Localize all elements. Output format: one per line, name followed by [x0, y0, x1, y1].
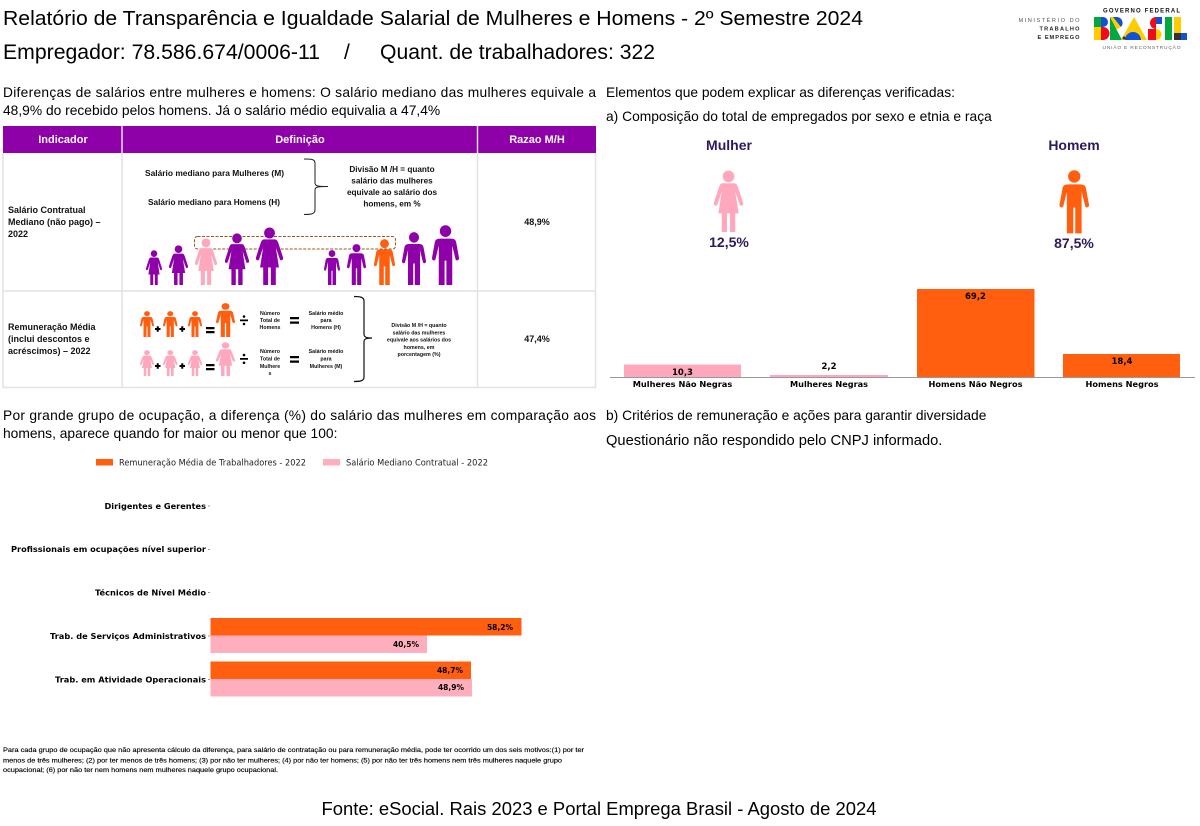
logo: ministério e governo federal: E EMPREGO [1038, 35, 1080, 41]
row: remuneração média: Divisão M /H = quanto [391, 323, 447, 329]
row: remuneração média: Salário médio [309, 349, 344, 355]
row: remuneração média: 47,4% [524, 334, 550, 344]
bar chart: composição por sexo e raça [610, 289, 1195, 389]
icon: man [1059, 170, 1089, 233]
logo: ministério e governo federal: MINISTÉRIO DO [1018, 17, 1080, 24]
bar chart: composição por sexo e raça: 10,3 [672, 368, 693, 378]
bar chart: diferença por grupo de ocupação: Profissionais em ocupações nível superior [11, 545, 206, 554]
gender share: mulher: Mulher [706, 137, 752, 153]
row: remuneração média: para [320, 318, 332, 324]
logo: ministério e governo federal: TRABALHO [1040, 26, 1080, 32]
row: remuneração média: homens, em [404, 345, 435, 351]
bar chart: diferença por grupo de ocupação: Dirigentes e Gerentes [104, 502, 206, 511]
footnote [3, 747, 585, 774]
heading: elementos explicativos: a) Composição do total de empregados por sexo e etnia e raça [606, 109, 992, 124]
legend: Remuneração Média de Trabalhadores - 2022 [119, 458, 306, 468]
row: remuneração média: Homens (H) [311, 325, 341, 331]
icon: women sum [140, 342, 235, 376]
row: salário contratual mediano: Salário mediano para Homens (H) [148, 198, 280, 207]
footnote: Para cada grupo de ocupação que não apresenta cálculo da diferença, para salário de contratação ou para remuneração média, pode ter ocorrido um dos seis motivos:(1) por ter [3, 747, 585, 754]
table: indicadores [3, 126, 596, 388]
row: remuneração média: porcentagem (%) [398, 352, 441, 358]
icon: woman [714, 170, 743, 232]
source: Fonte: eSocial. Rais 2023 e Portal Emprega Brasil - Agosto de 2024 [322, 799, 876, 819]
bar chart: composição por sexo e raça: Mulheres Não Negras [633, 380, 732, 389]
row: remuneração média: Número [260, 349, 281, 355]
footnote: menos de três mulheres; (2) por ter menos de três homens; (3) por não ter mulheres; (4) por não ter homens; (5) por não ter três homens nem três mulheres naquele grupo [3, 758, 562, 764]
title [3, 8, 863, 64]
row: salário contratual mediano: Divisão M /H = quanto [349, 165, 435, 174]
row: salário contratual mediano: Mediano (não pago) – [8, 217, 101, 227]
row: salário contratual mediano [8, 159, 550, 285]
row: remuneração média: (inclui descontos e [8, 334, 90, 344]
text: critérios de remuneração [606, 408, 987, 449]
gender share: homem [1048, 137, 1100, 251]
logo: ministério e governo federal [1018, 8, 1187, 51]
heading: elementos explicativos: Elementos que podem explicar as diferenças verificadas: [606, 85, 955, 100]
gender share: mulher: 12,5% [709, 234, 749, 250]
intro text: diferenças de salários [3, 85, 596, 118]
icon: men sum [140, 303, 235, 337]
footnote: ocupacional; (6) por não ter nem homens nem mulheres naquele grupo ocupacional. [3, 767, 278, 774]
bar chart: diferença por grupo de ocupação: 48,9% [438, 683, 464, 692]
row: remuneração média: Mulheres (M) [310, 364, 343, 370]
row: remuneração média: Homens [260, 325, 280, 331]
icon: row of men [324, 225, 459, 285]
row: remuneração média: Total de [260, 318, 280, 324]
title: Empregador: 78.586.674/0006-11 [3, 41, 320, 64]
text: grupo de ocupação [3, 408, 596, 441]
bar chart: diferença por grupo de ocupação: 48,7% [437, 666, 463, 675]
bar chart: composição por sexo e raça: Homens Não Negros [928, 380, 1023, 389]
table header: Indicador [38, 134, 88, 146]
bar chart: composição por sexo e raça: 18,4 [1112, 357, 1133, 367]
icon: row of women [146, 227, 283, 285]
row: remuneração média: Salário médio [309, 311, 344, 317]
row: remuneração média: Remuneração Média [8, 322, 97, 332]
bar chart: diferença por grupo de ocupação [11, 458, 522, 696]
row: salário contratual mediano: 48,9% [524, 217, 550, 227]
gender share: homem: Homem [1048, 137, 1100, 153]
bar chart: composição por sexo e raça: Mulheres Negras [790, 380, 868, 389]
bar chart: diferença por grupo de ocupação: Trab. em Atividade Operacionais [55, 676, 206, 684]
gender share: homem: 87,5% [1054, 235, 1094, 251]
gender share: mulher [706, 137, 752, 250]
row: remuneração média: acréscimos) – 2022 [8, 346, 91, 356]
text: critérios de remuneração: Questionário não respondido pelo CNPJ informado. [606, 433, 942, 449]
row: salário contratual mediano: equivale ao salário dos [347, 188, 437, 197]
text: critérios de remuneração: b) Critérios de remuneração e ações para garantir diversidade [606, 408, 987, 423]
row: remuneração média [8, 296, 550, 382]
row: remuneração média: equivale aos salários dos [387, 338, 451, 344]
title: Quant. de trabalhadores: 322 [380, 41, 655, 64]
row: remuneração média: Mulhere [260, 364, 280, 370]
bar chart: diferença por grupo de ocupação: 58,2% [487, 623, 513, 632]
title: Relatório de Transparência e Igualdade Salarial de Mulheres e Homens - 2º Semestre 2024 [3, 8, 863, 30]
bar chart: composição por sexo e raça: Homens Negros [1086, 380, 1159, 389]
row: salário contratual mediano: Salário Contratual [8, 205, 86, 215]
heading: elementos explicativos [606, 85, 992, 124]
table header [3, 126, 596, 153]
intro text: diferenças de salários: 48,9% do recebido pelos homens. Já o salário médio equivalia a 47,4% [3, 103, 440, 118]
row: remuneração média: para [320, 356, 332, 362]
row: salário contratual mediano: Salário mediano para Mulheres (M) [145, 169, 284, 178]
text: grupo de ocupação: Por grande grupo de ocupação, a diferença (%) do salário das mulheres em comparação aos [3, 408, 596, 423]
row: remuneração média: s [269, 371, 272, 377]
bar chart: diferença por grupo de ocupação: Trab. de Serviços Administrativos [50, 632, 206, 641]
table header: Razao M/H [509, 134, 565, 146]
row: salário contratual mediano: salário das mulheres [351, 176, 433, 186]
table header: Definição [275, 134, 325, 146]
title: / [344, 41, 350, 64]
intro text: diferenças de salários: Diferenças de salários entre mulheres e homens: O salário mediano das mulheres equivale a [3, 85, 596, 100]
text: grupo de ocupação: homens, aparece quando for maior ou menor que 100: [3, 426, 337, 441]
legend [96, 458, 488, 468]
legend: Salário Mediano Contratual - 2022 [346, 458, 488, 468]
bar chart: diferença por grupo de ocupação: 40,5% [393, 640, 419, 649]
row: remuneração média: Total de [260, 356, 280, 362]
bar chart: composição por sexo e raça: 69,2 [965, 292, 986, 302]
row: salário contratual mediano: 2022 [8, 229, 28, 239]
row: salário contratual mediano: homens, em % [363, 200, 421, 208]
bar chart: composição por sexo e raça: 2,2 [821, 362, 837, 372]
icon: operators [155, 315, 299, 370]
bar chart: diferença por grupo de ocupação: Técnicos de Nível Médio [95, 588, 207, 598]
logo: ministério e governo federal: UNIÃO E RECONSTRUÇÃO [1102, 44, 1181, 51]
row: remuneração média: salário das mulheres [393, 330, 445, 336]
logo: ministério e governo federal: GOVERNO FEDERAL [1103, 8, 1180, 14]
row: remuneração média: Número [260, 311, 281, 317]
